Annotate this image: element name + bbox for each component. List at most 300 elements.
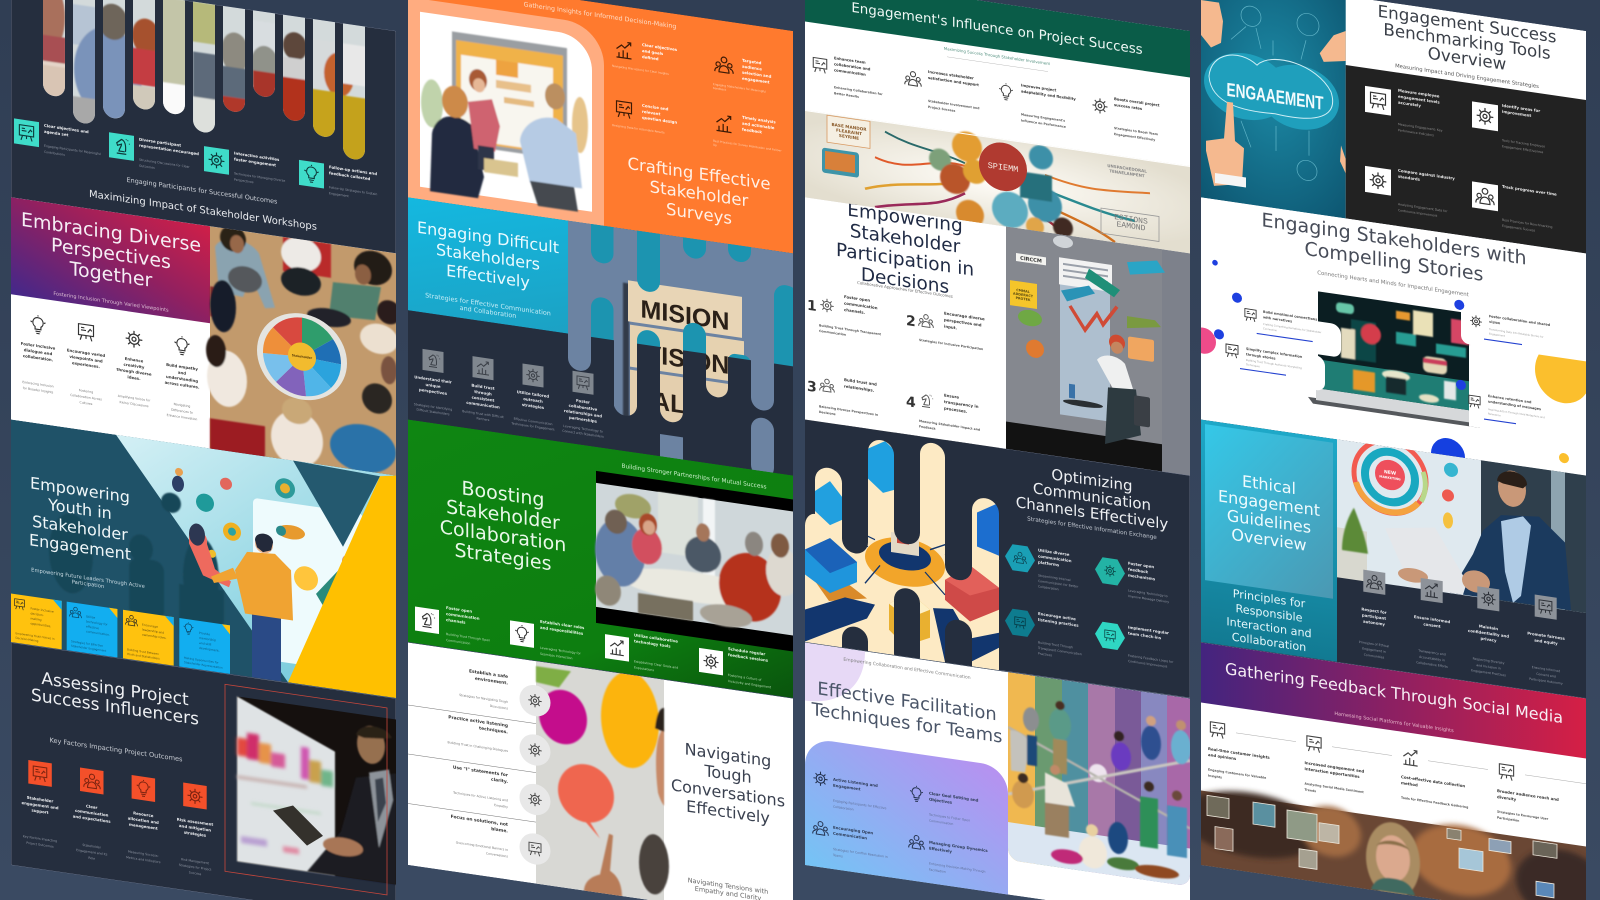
tool: compare standards (1365, 163, 1455, 220)
card: inclusive decisions: Decision-Making (16, 636, 39, 643)
dark panel with four tools (1346, 65, 1586, 254)
slide: Embracing Diverse Perspectives Together (11, 193, 401, 482)
subtitle: Connecting Hearts and Minds for Impactful Engagement (1317, 270, 1469, 298)
title: Surveys (666, 200, 732, 228)
benefit: customer insights (1208, 721, 1296, 790)
benefit: cost effective: Tools for Effective Feedback Gathering (1401, 796, 1468, 809)
item: open communication (415, 601, 490, 648)
factor: stakeholder engagement: Stakeholder (27, 795, 53, 804)
title: Techniques for Teams (811, 699, 1002, 748)
factor: communication: Clear (86, 803, 97, 810)
column: perspectives: Strategies for Identifying (414, 402, 452, 412)
tool: track progress: Track progress over time (1502, 184, 1557, 197)
teal left column (1201, 420, 1337, 662)
tool: measure engagement (1365, 83, 1443, 139)
item: success rates: success rates (1114, 103, 1143, 111)
item: active listening: listening practices (1038, 617, 1079, 628)
row: active listening: techniques. (479, 725, 508, 736)
survey item: analysis: feedback (742, 127, 762, 135)
item: team check-ins: Continuous Improvement (1128, 659, 1168, 669)
item: diverse platforms (1005, 543, 1079, 594)
column: inclusive dialogue: Foster inclusive (21, 341, 56, 351)
title: Stakeholder (650, 177, 749, 211)
card: mentorship: development. (199, 646, 220, 653)
story card: shared vision: Engagement (1489, 332, 1505, 338)
benefit: customer insights: Insights (1208, 774, 1222, 780)
column: varied viewpoints: Fostering (79, 388, 93, 394)
title: Crafting Effective (627, 154, 771, 194)
survey item: audience (713, 53, 772, 98)
benefit: broader audience: Broader audience reach and (1497, 788, 1559, 802)
survey item: audience: Engaging Stakeholders for Meaningful (713, 82, 766, 94)
item: team collaboration: Enhancing Collaboration for (834, 85, 883, 96)
title: Communication (1033, 479, 1151, 514)
column: partnerships (562, 369, 604, 439)
title: Youth in (47, 495, 112, 523)
factor: communication (73, 766, 111, 863)
factor: resources: Measuring Success: (128, 850, 159, 858)
benefit: interaction opportunities (1304, 735, 1392, 804)
column: outreach (510, 362, 555, 432)
item: success rates: Strategies to Boost Team (1114, 126, 1158, 136)
column: trust: communication (466, 400, 500, 410)
principle: confidentiality: Engagement Practices (1471, 668, 1506, 677)
card: leadership: leadership and (142, 628, 164, 635)
item: active listening: Encourage active (1038, 611, 1076, 621)
item: feedback sessions: Schedule regular (728, 646, 765, 656)
factor: communication: Role (88, 856, 95, 861)
column: creativity: Amplifying Voices for (118, 394, 151, 403)
illustration: colourful mind map: EAMOND (1117, 220, 1146, 234)
illustration: worker at a wall of notes: CIRCCM (1020, 256, 1042, 265)
principle: fairness: Promote fairness (1527, 630, 1565, 641)
photo: team meeting with letterbox bars (595, 471, 800, 653)
column: inclusive dialogue: dialogue and (24, 347, 52, 356)
column: inclusive dialogue: Embracing Inclusion (22, 380, 54, 389)
item: diverse platforms: Streamlining Internal (1038, 573, 1071, 582)
gradient title panel (11, 197, 210, 323)
item 4: Feedback (919, 424, 937, 431)
item: team collaboration: communication (834, 68, 866, 77)
subtitle: Strategies for Effective Communication (425, 291, 551, 318)
item: feedback mechanisms: mechanisms (1128, 573, 1156, 582)
column: creativity (116, 328, 152, 409)
item: diverse platforms: communication (1038, 553, 1072, 563)
slide: Maximizing Impact of Stakeholder Workshops (11, 0, 396, 254)
tool: measure engagement: accurately (1398, 100, 1421, 108)
subtitle: Participation (72, 579, 104, 590)
column: perspectives: unique (425, 382, 441, 389)
principle: confidentiality (1468, 585, 1509, 678)
illustration: engagement cloud and pointing hands (1201, 0, 1346, 219)
item 3: relationships. (844, 383, 875, 393)
slide: Crafting Effective Stakeholder Surveys (408, 0, 793, 254)
photo: wooden mission vision values blocks: VISION (645, 340, 729, 380)
title: Collaboration (440, 515, 566, 557)
title: Stakeholders (436, 240, 540, 274)
item: success rates: Engagement Effectively (1114, 132, 1155, 142)
tool: measure engagement: Measure employee (1398, 88, 1440, 99)
watercolor illustration of three people at a board (420, 12, 592, 215)
item: roles: Establish clear roles (540, 619, 585, 630)
blue numbered markers (1214, 264, 1466, 391)
item 3: Build trust and (844, 377, 877, 387)
title: Engagement (1218, 486, 1320, 520)
subtitle: Strategies for Effective Information Exchange (1027, 516, 1157, 541)
slide: Engaging Stakeholders with Compelling Stories (1190, 196, 1591, 493)
column: creativity: creativity (124, 362, 145, 370)
item: technology tools: Utilize collaborative (634, 632, 678, 644)
subtitle: Collaborative Approaches for Effective Outcomes (857, 280, 953, 299)
story card: retention: understanding of messages (1488, 400, 1541, 411)
tool: compare standards: standards (1398, 174, 1421, 182)
item: clear objectives: Contributions (44, 150, 65, 157)
title: Engagement's Influence on Project Success (851, 0, 1143, 58)
principle: autonomy: participant (1362, 612, 1386, 621)
technique: open communication: Strategies for Conflict Resolution in (833, 847, 888, 859)
teal and dark pill cut-outs over the photo (568, 201, 799, 483)
slide: Empowering Stakeholder Participation in Decisions (805, 193, 1190, 476)
item: team check-ins: team check-ins (1128, 631, 1162, 640)
title: Empowering (847, 200, 963, 237)
item: interactive activities (204, 146, 286, 184)
item: interactive activities: Interactive activities (234, 150, 280, 162)
item: interactive activities: Techniques for Managing Diverse (233, 171, 285, 183)
technique: goal setting: Techniques to Foster Open (928, 812, 970, 823)
principle: informed consent: Transparency and (1417, 648, 1446, 657)
item: interactive activities: foster engagement (234, 156, 276, 168)
technique: open communication: Teams (832, 853, 843, 859)
card: mentorship: mentorship (199, 636, 216, 642)
item: stakeholder satisfaction: Stakeholder Involvement and (928, 99, 979, 110)
silhouettes on dark background (49, 492, 225, 624)
technique: open communication (813, 820, 888, 865)
slide: Navigating Tough Conversations Effectively (408, 640, 793, 900)
principle: fairness: Ensuring Informed (1532, 665, 1560, 673)
survey item: analysis: and actionable (742, 121, 775, 130)
factor: resources: management (129, 822, 158, 831)
title: Tough (703, 761, 752, 787)
item: team check-ins: Fostering Feedback Loops for (1128, 654, 1174, 664)
item: feedback mechanisms: Improve Message Delivery (1128, 594, 1169, 604)
photo: wooden mission vision values blocks: MISION (641, 295, 729, 336)
title: Engaging Difficult (417, 218, 559, 257)
principle: informed consent: Collaborative Efforts (1416, 660, 1448, 669)
principle: informed consent: consent (1423, 621, 1441, 629)
tool: identify improvements: Engagement Effectiveness (1502, 144, 1544, 154)
subtitle: Engaging Participants for Successful Outcomes (127, 176, 278, 206)
tool: identify improvements: improvement (1502, 109, 1531, 118)
column: trust: Partners (477, 416, 490, 422)
title: Stakeholder (446, 495, 560, 535)
item 2: Encourage diverse (944, 311, 985, 321)
column: outreach: Techniques for Engagement (510, 421, 555, 432)
story card: shared vision (1461, 305, 1586, 361)
technique: group dynamics: Facilitation (929, 868, 946, 874)
item: stakeholder satisfaction: Increases stakeholder (928, 70, 974, 81)
survey item: audience: engagement (742, 76, 770, 85)
principle: autonomy (1359, 569, 1389, 660)
item 3: Balancing Diverse Perspectives in (819, 404, 878, 417)
item: follow-up actions (299, 160, 378, 198)
subtitle: and Collaboration (460, 304, 516, 320)
illustration: worker at a wall of notes: ADDERACT (1013, 292, 1034, 299)
principle: informed consent: Accountability in (1419, 655, 1445, 662)
slide: Engagement's Influence on Project Success (805, 0, 1190, 260)
story card: emotional connections: Connection (1263, 326, 1277, 332)
item 1: 1 (807, 298, 817, 315)
survey item: analysis: Up (713, 143, 717, 147)
item 2 (906, 305, 985, 351)
subtitle: Building Stronger Partnerships for Mutual Success (622, 464, 766, 491)
tool: compare standards: Compare against industry (1398, 168, 1455, 181)
item: open communication: channels (446, 617, 466, 625)
survey item: analysis: Timely analysis (742, 115, 776, 125)
column: partnerships: Connect with Stakeholders (562, 429, 604, 439)
dark teal corner triangle (293, 461, 380, 552)
column: empathy: understanding (166, 374, 198, 384)
illustration: worker at a wall of notes: PROTEK (1016, 296, 1031, 302)
subtitle: Collaboration (1232, 631, 1306, 654)
subtitle: Fostering Inclusion Through Varied Viewpoints (53, 291, 169, 314)
item: diverse participants: representation encouraged (139, 143, 199, 156)
light illustration panel (116, 435, 396, 698)
photo: man with tablet and marketing chart: NEW (1384, 469, 1396, 477)
card: technology: Strategies for Effective (71, 639, 103, 648)
card: leadership: Youth and Stakeholders (127, 652, 160, 661)
title: Stakeholder (850, 221, 961, 258)
title: Overview (1428, 43, 1507, 74)
red outline frame (225, 684, 387, 895)
white document panel (253, 498, 363, 674)
column: trust: through (474, 389, 492, 397)
item: stakeholder satisfaction: Project Success (928, 105, 955, 113)
slide: Assessing Project Success Influencers (11, 642, 396, 900)
slide: Effective Facilitation Techniques for Teams (805, 642, 1191, 900)
benefit: customer insights: Real-time customer insights (1208, 746, 1270, 760)
survey item: objectives: Navigating Discussions for Clear Insights (612, 64, 669, 76)
column: empathy: Enhance Innovation (167, 413, 197, 421)
row: safe environment (408, 660, 550, 726)
factor: communication: Engagement and Its (76, 848, 108, 857)
item: roles (510, 614, 585, 662)
technique: goal setting: Clear Goal Setting and (929, 791, 979, 803)
factor: risk: Success (189, 870, 202, 876)
column: trust: Build trust (471, 383, 495, 391)
factor: risk: Strategies for Project (179, 863, 212, 872)
column: partnerships: Foster (576, 398, 590, 405)
item 2: 2 (906, 313, 916, 330)
principle: fairness (1527, 593, 1565, 686)
story card: shared vision: vision (1489, 320, 1501, 325)
item: diverse platforms: platforms (1038, 559, 1060, 568)
card: leadership (123, 610, 174, 666)
factor: communication: communication (75, 808, 109, 818)
survey item: analysis (713, 110, 782, 157)
column: varied viewpoints: experiences. (72, 360, 100, 369)
story card: shared vision: Foster collaboration and shared (1489, 314, 1551, 327)
technique: group dynamics: Effectively (929, 846, 952, 854)
item 1: Building Trust Through Transparent (819, 323, 882, 336)
row: safe environment: Discussions (490, 704, 508, 711)
title: Stakeholder (32, 512, 128, 545)
item 4: Ensure (944, 393, 959, 400)
subtitle: Key Factors Impacting Project Outcomes (50, 736, 183, 764)
principle: autonomy: Engagement in (1362, 646, 1386, 654)
item: clear objectives: Clear objectives and (44, 123, 89, 134)
card: leadership: Building Trust Between (127, 647, 159, 656)
title: Embracing Diverse (21, 208, 201, 257)
card: mentorship: Provide (199, 631, 210, 636)
technique: group dynamics: Enhancing Decision-Making Through (929, 862, 985, 874)
item 1 (807, 289, 882, 342)
row: safe environment: Establish a safe (469, 668, 508, 680)
card: mentorship: Making Opportunities for (184, 656, 219, 665)
column: creativity: Richer Discussions (120, 400, 149, 408)
card: leadership: Encourage (142, 623, 158, 629)
column: inclusive dialogue: collaboration. (23, 353, 54, 363)
card: technology: Utilize (86, 614, 95, 620)
illustration: colourful mind map: FLEARAINT (836, 128, 862, 136)
row: solutions: Focus on solutions, not (451, 814, 508, 828)
item 2: Strategies for Inclusive Participation (919, 338, 983, 351)
card: inclusive decisions: Foster inclusive (30, 606, 54, 614)
principle: informed consent: Ensure informed (1414, 614, 1450, 624)
item: team check-ins (1095, 620, 1174, 670)
item: adaptability (999, 80, 1076, 130)
item: team collaboration (813, 53, 883, 102)
survey item: analysis: Best Practices for Survey Distribution and Follow- (713, 139, 782, 153)
light orange image panel (408, 0, 604, 226)
item 3: 3 (807, 379, 817, 396)
technique: open communication: Communication (833, 831, 867, 841)
card: inclusive decisions (11, 594, 62, 650)
item: active listening (1005, 606, 1082, 662)
photo: wooden mission vision values blocks: VALUES (637, 385, 737, 427)
row: solutions (451, 814, 550, 867)
item: technology tools: Establishing Clear Goals and (634, 659, 678, 670)
yellow corner triangle (288, 460, 396, 698)
story card: emotional connections: Build emotional connections (1263, 310, 1317, 322)
survey item: audience: Feedback (713, 86, 727, 92)
survey item: objectives: and goals (642, 48, 664, 56)
item: diverse platforms: Utilize diverse (1038, 547, 1070, 557)
tool: compare standards: Continuous Improvement (1398, 208, 1438, 218)
row: I statements: Empathy (494, 803, 508, 809)
item 1: Foster open (844, 294, 870, 303)
tool: track progress (1472, 179, 1557, 236)
factor: stakeholder engagement: engagement and (21, 800, 59, 810)
photo: businessman with tablet (237, 696, 396, 885)
survey item: question design: question design (642, 115, 677, 125)
technique: open communication: Encouraging Open (833, 825, 873, 835)
lighter title panel (1205, 424, 1333, 599)
title: Strategies (454, 538, 552, 575)
card: technology: technology for (86, 619, 108, 627)
column: outreach: Effective Communication (514, 417, 552, 426)
story card: retention (1469, 389, 1546, 437)
illustration: colourful mind map: BASE MANDOR (831, 122, 867, 132)
item 1: Communication (819, 329, 846, 337)
factor: risk: and mitigation (179, 823, 211, 833)
item 4: processes. (944, 406, 968, 414)
illustration: worker at a wall of notes: CMMAL (1016, 288, 1031, 294)
story card: emotional connections: with narratives (1263, 315, 1292, 324)
slide: Optimizing Communication Channels Effectively (805, 400, 1190, 716)
item 4 (906, 387, 980, 437)
item: team collaboration: collaboration and (834, 62, 871, 72)
principle: confidentiality: Respecting Diversity (1473, 657, 1505, 665)
item: active listening: Practices (1038, 651, 1052, 657)
green header band (805, 0, 1190, 78)
principle: autonomy: Principles of Ethical (1359, 640, 1389, 648)
item 4: Measuring Stakeholder Impact and (919, 419, 980, 432)
title: Guidelines (1227, 506, 1311, 537)
benefit: cost effective: Cost-effective data collection (1401, 774, 1465, 788)
illustration: colourful mind map: SPIEMM (988, 161, 1018, 175)
benefit: interaction opportunities: interaction opportunities (1304, 766, 1360, 779)
principle: confidentiality: confidentiality and (1468, 628, 1509, 639)
title: Success Influencers (31, 685, 199, 730)
item: open communication: Foster open (446, 605, 472, 614)
title: Navigating (685, 739, 771, 771)
tool: identify improvements: Tools for Tracking Employee (1501, 138, 1545, 149)
item: team collaboration: Better Results (834, 91, 859, 99)
item: open communication: communication (446, 611, 480, 621)
technique: goal setting: Communication (929, 819, 953, 826)
gradient header band (1201, 642, 1586, 759)
title: Overview (1231, 525, 1307, 555)
item: success rates: Boosts overall project (1114, 97, 1160, 108)
item: diverse platforms: Communication for Better (1038, 579, 1079, 589)
item: adaptability: adaptability and flexibility (1021, 89, 1076, 101)
item: adaptability: Measuring Engagement's (1021, 112, 1065, 123)
item: feedback mechanisms: Leveraging Technology to (1128, 589, 1168, 598)
story card: retention: Relevance (1488, 412, 1501, 417)
technique: active listening: Active Listening and (833, 777, 878, 788)
subtitle: Navigating Tensions with (688, 876, 768, 896)
technique: group dynamics: Managing Group Dynamics (929, 840, 988, 853)
item 4: transparency in (944, 399, 979, 409)
survey item: question design: Concise and (642, 103, 669, 112)
item: feedback mechanisms (1095, 556, 1169, 604)
column: outreach: outreach (523, 396, 543, 404)
column: partnerships: Leveraging Technology to (563, 424, 603, 434)
card: technology: communication. (86, 629, 110, 637)
principle: confidentiality: and Inclusion in (1476, 663, 1501, 671)
column: empathy (165, 334, 200, 422)
principle: confidentiality: privacy (1480, 636, 1497, 643)
illustration: colourful mind map: TENAELANPENT (1109, 168, 1145, 178)
title: Optimizing (1051, 465, 1133, 495)
technique: goal setting (910, 785, 979, 830)
item: success rates (1092, 94, 1160, 143)
story card: simplify information: through stories (1246, 352, 1276, 361)
factor: risk: Risk Management (181, 857, 210, 865)
survey item: audience: Targeted (742, 58, 762, 65)
slide: Boosting Stakeholder Collaboration Strategies (408, 420, 800, 699)
row: active listening: Building Trust in Challenging Dialogues (448, 740, 508, 753)
row: solutions: blame. (491, 826, 508, 835)
story card: simplify information: Simplify complex information (1246, 347, 1303, 359)
principle: autonomy: Respect for (1361, 606, 1387, 615)
subtitle: Principles for (1233, 587, 1306, 611)
row: solutions: Conversations (486, 851, 508, 859)
photo: man with tablet and marketing chart: MARKETING (1379, 474, 1401, 482)
item: interactive activities: Perspectives (234, 177, 254, 184)
benefit: customer insights: Engaging Customers for Valuable (1208, 768, 1266, 780)
slide: Engaging Difficult Stakeholders Effectively (408, 177, 799, 483)
